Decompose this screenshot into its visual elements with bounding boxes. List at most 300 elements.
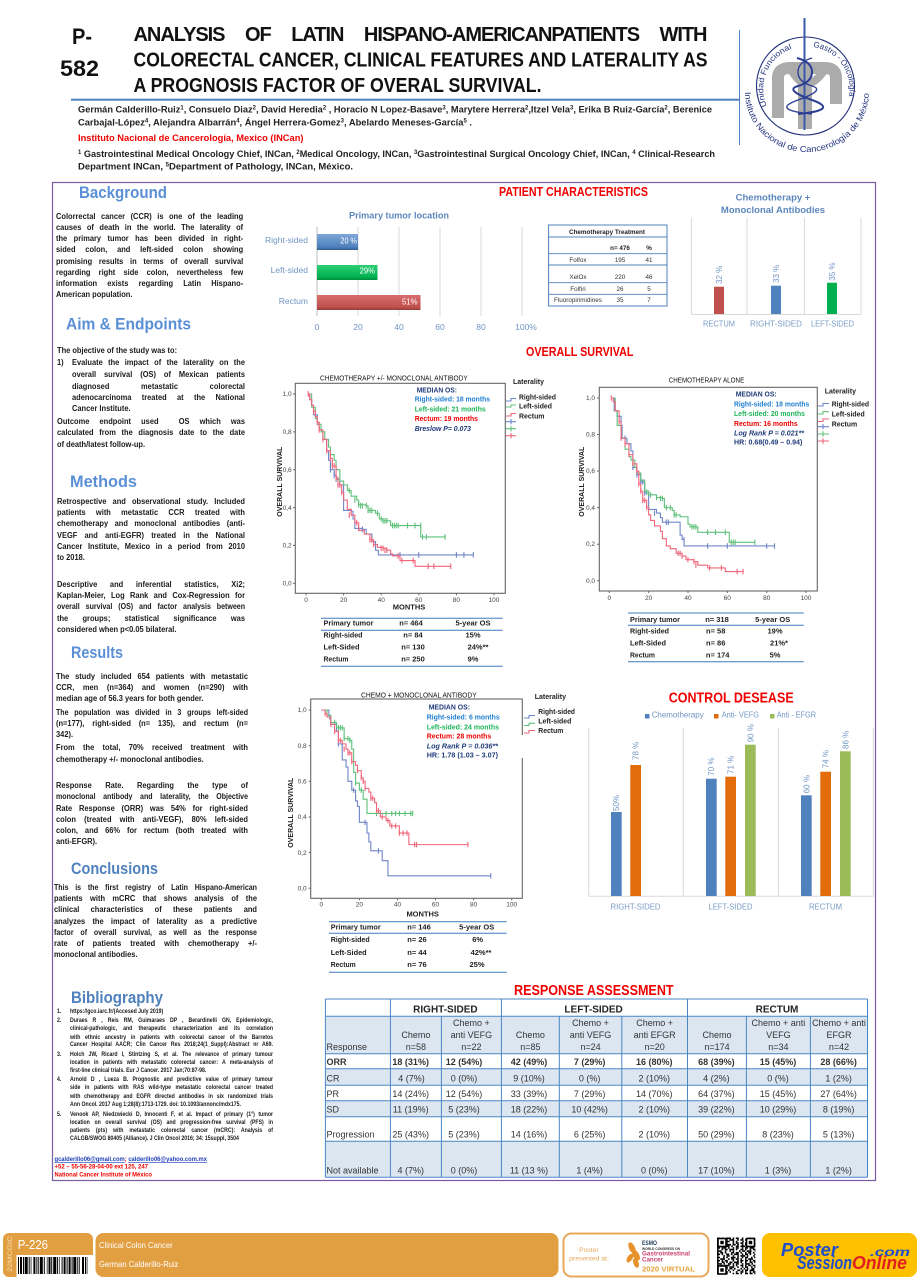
footer: session and author band: Clinical Colon Cancer [99,1240,173,1250]
list: bibliography references: Arnold D , Lueza B. Prognostic and predictive value of primary tumour [70,1076,273,1083]
chart: Kaplan-Meier chemotherapy +/- monoclonal antibody: Laterality [513,377,545,386]
list: bibliography references: side in patients with RAS wild-type metastatic colorectal cancer treated [70,1084,273,1091]
list: bibliography references: location in patients with metastatic colorectal cancer: A meta-analysis of [70,1059,273,1066]
table: 5-year OS, chemo + monoclonal antibody: n= 76 [407,960,427,969]
table: response assessment: 7 (29%) [574,1089,605,1099]
footer: congress badge: 2020 VIRTUAL [642,1267,696,1274]
chart legend: Chemotherapy [652,711,704,720]
chart: Kaplan-Meier chemotherapy +/- monoclonal antibody: 80 [453,597,460,604]
table: response assessment: n=58 [406,1042,426,1052]
icon: QR code [717,1238,755,1275]
text block: methods design: chemotherapy and monoclonal antibodies (anti- [57,518,245,528]
table: 5-year OS, chemo + monoclonal antibody: Left-Sided [331,948,367,957]
table: response assessment: n=22 [461,1042,482,1052]
text block: response rate: colon, and 66% for rectum (both treated with [56,825,248,835]
bar chart: primary tumor location: 20 % [340,235,357,245]
table: response assessment: 8 (23%) [762,1130,794,1140]
text block: methods design: Retrospective and observational study. Included [57,496,245,506]
icon: institute logo: Gastro - Oncología [814,42,856,96]
table: response assessment: 0 (0%) [451,1166,477,1176]
table: 5-year OS, chemotherapy alone: n= 318 [705,615,729,624]
text block: conclusions [54,882,257,959]
text block: results population: chemotherapy +/- monoclonal antibodies. [56,754,204,764]
table: 5-year OS, chemo + monoclonal antibody: Right-sided [331,935,370,944]
bar chart: primary tumor location: 0 [315,322,320,332]
table: response assessment: Chemo + anti [752,1018,805,1028]
table: response assessment: 6 (25%) [574,1130,605,1140]
text: 1. [57,1008,61,1015]
list: objective item: adenocarcinoma treated at the National [72,392,245,402]
table: 5-year OS, all patients: Left-Sided [324,643,360,652]
chart: Kaplan-Meier chemotherapy alone: 0,4 [586,505,595,512]
chart: Kaplan-Meier chemotherapy +/- monoclonal antibody: 0 [304,597,308,604]
chart: Kaplan-Meier chemotherapy alone: 0,8 [586,432,595,438]
table: 5-year OS, chemo + monoclonal antibody [329,922,507,972]
authors: Carbajal-López4, Alejandra Albarrán4, Ángel Herrera-Gomez3, Abelardo Meneses-García5 . [78,118,472,128]
table: chemotherapy treatment: Fluoropirimidines [554,297,602,304]
table: 5-year OS, chemotherapy alone: Left-Sided [630,639,666,648]
chart: Kaplan-Meier chemotherapy alone: 60 [724,595,731,602]
chart: Kaplan-Meier chemo + monoclonal antibody: 0 [319,902,323,909]
table: response assessment: 2 (10%) [639,1130,670,1140]
bar chart: chemotherapy + monoclonal antibodies: 35 % [828,262,837,281]
list: objective item: diagnosed metastatic colorectal [72,381,245,391]
chart legend: Anti - EFGR [777,711,816,720]
chart: Kaplan-Meier chemotherapy alone: 80 [763,595,771,602]
chart: Kaplan-Meier chemotherapy +/- monoclonal antibody: 0,2 [283,542,292,550]
chart: Kaplan-Meier chemo + monoclonal antibody: MEDIAN OS: [429,703,470,712]
chart: Kaplan-Meier chemotherapy +/- monoclonal antibody: CHEMOTHERAPY +/- MONOCLONAL ANTIBODY [320,374,468,383]
bar chart: primary tumor location: 20 [353,322,363,332]
list: bibliography references: Ann Oncol. 2017 Aug 1;28(8):1713-1729. doi: 10.1093/annonc/mdx175. [70,1101,241,1108]
table: response assessment: VEFG [766,1030,791,1040]
table: response assessment: 68 (39%) [698,1057,735,1067]
text block: results population: CCR, men (n=364) and women (n=290) with [56,682,248,692]
table: chemotherapy treatment: Folfox [569,257,587,264]
list: objective item: Evaluate the impact of the laterality on the [72,357,245,367]
text block: background: information exists regarding Latin Hispano- [56,278,243,288]
chart: Kaplan-Meier chemo + monoclonal antibody: 60 [432,902,439,909]
list: bibliography references: Holch JW, Ricard I, Stintzing S, et al. The relevance of primary tumour [70,1051,273,1058]
footer: session and author band [96,1233,558,1277]
contact details: +52 – 55-56-28-04-00 ext 125, 247 [54,1164,148,1171]
footer: congress badge: ESMO [642,1240,657,1247]
footer: PosterSessionOnline logo: Online [852,1253,907,1273]
text block: response rate: monoclonal antibody and laterality, the Objective [56,791,248,801]
text: 3. [57,1051,61,1058]
chart: Kaplan-Meier chemotherapy alone: Left-sided [832,410,865,419]
chart: Kaplan-Meier chemo + monoclonal antibody: Rectum: 28 months [427,732,491,741]
footer: PosterSessionOnline logo: Session [797,1253,852,1273]
text block: outcome endpoint [57,416,245,449]
text block: response rate: Rate Response (ORR) was 54% for right-sided [56,803,248,813]
table: response assessment: 2 (10%) [639,1074,670,1084]
icon: wheat ornament [625,1241,642,1269]
chart: Kaplan-Meier chemotherapy +/- monoclonal antibody: Left-sided: 21 months [415,404,486,414]
table: response assessment: RIGHT-SIDED [413,1004,478,1015]
table: 5-year OS, chemotherapy alone [628,613,804,662]
chart: Kaplan-Meier chemo + monoclonal antibody: CHEMO + MONOCLONAL ANTIBODY [361,691,477,700]
chart: Kaplan-Meier chemotherapy +/- monoclonal antibody: Left-sided [519,401,552,410]
chart: Kaplan-Meier chemotherapy +/- monoclonal antibody: 60 [415,597,423,604]
bar chart: control desease [589,711,873,911]
chart: Kaplan-Meier chemotherapy +/- monoclonal antibody: Right-sided [519,392,556,401]
table: response assessment: anti VEFG [451,1030,492,1040]
table: response assessment: 27 (64%) [820,1089,857,1099]
chart: Kaplan-Meier chemo + monoclonal antibody: 0,8 [298,743,307,750]
table: response assessment: Chemo + [453,1018,490,1028]
bar chart: primary tumor location: 51% [402,296,418,306]
table: response assessment: 0 (%) [579,1074,600,1084]
table: response assessment: 4 (7%) [397,1166,424,1176]
footer: congress badge: Gastrointestinal [642,1252,690,1258]
text block: outcome endpoint: of death/latest follow-up. [57,439,145,449]
bar chart: primary tumor location: Rectum [279,296,308,306]
table: response assessment: 7 (29%) [574,1057,605,1067]
heading: patient characteristics: PATIENT CHARACTERISTICS [499,184,648,199]
chart: Kaplan-Meier chemo + monoclonal antibody: Right-sided: 6 months [427,713,500,722]
table: response assessment: PR [326,1089,340,1099]
chart: Kaplan-Meier chemo + monoclonal antibody: 80 [470,902,478,909]
list: bibliography references: clinical-pathologic, and therapeutic characterization and its correlation [70,1025,273,1032]
footer: session and author band: German Calderillo-Ruiz [99,1259,178,1269]
heading: Methods: Methods [70,472,137,491]
icon: institute logo [745,18,869,152]
text block: outcome endpoint: Outcome endpoint used OS which was [57,416,245,426]
chart: Kaplan-Meier chemotherapy alone: 0,6 [586,468,595,475]
chart: Kaplan-Meier chemo + monoclonal antibody: HR: 1.78 (1.03 – 3.07) [427,751,498,760]
heading: Aim and Endpoints: Aim & Endpoints [66,314,191,334]
text block: methods design: patients with metastatic CCR treated with [57,507,245,517]
footer: poster id and barcode: P-226 [18,1237,48,1252]
text block: response rate [56,780,248,846]
table: response assessment: Chemo + [636,1018,673,1028]
affiliations [78,149,715,172]
table: response assessment: 15 (45%) [760,1057,796,1067]
table: response assessment: 4 (2%) [703,1074,730,1084]
table: response assessment: 9 (10%) [513,1074,545,1084]
table: 5-year OS, chemo + monoclonal antibody: 6% [472,935,483,944]
table: 5-year OS, chemotherapy alone: n= 86 [706,639,725,648]
title [134,24,708,97]
chart: Kaplan-Meier chemotherapy alone: 40 [684,595,692,602]
chart: Kaplan-Meier chemotherapy alone: Laterality [825,387,857,396]
table: response assessment: Chemo [516,1030,545,1040]
list: bibliography references: Cancer Hospital AACR; Clin Cancer Res 2018;24(1_Suppl):Abstract nr A69. [70,1041,273,1048]
heading: Background: Background [79,183,167,202]
chart: Kaplan-Meier chemotherapy +/- monoclonal antibody: Breslow P= 0.073 [415,424,472,433]
title: COLORECTAL CANCER, CLINICAL FEATURES AND LATERALITY AS [134,50,708,72]
footer: poster id and barcode: 22MCGIC [7,1236,14,1272]
table: response assessment: Response [326,1042,367,1052]
chart: Kaplan-Meier chemotherapy alone: Right-sided [832,400,869,409]
chart: Kaplan-Meier chemotherapy alone: Left-sided: 20 months [734,409,805,418]
chart: Kaplan-Meier chemotherapy +/- monoclonal antibody: MONTHS [393,602,425,611]
heading: Bibliography: Bibliography [71,988,163,1007]
chart: Kaplan-Meier chemotherapy alone: CHEMOTHERAPY ALONE [669,376,744,385]
table: 5-year OS, chemotherapy alone: Right-sided [630,627,669,636]
table: response assessment: 5 (23%) [448,1105,480,1115]
text block: results population: median age of 56.3 years for both gender. [56,693,204,703]
text block: methods design: Cancer Institute, Mexico in a period from 2010 [57,541,245,551]
text block: background: Colorrectal cancer (CCR) is one of the leading [56,210,243,220]
heading: overall survival: OVERALL SURVIVAL [526,344,634,359]
table: response assessment: 5 (13%) [823,1130,854,1140]
chart: Kaplan-Meier chemotherapy +/- monoclonal antibody: 1,0 [283,391,292,398]
chart: Kaplan-Meier chemotherapy alone: Log Rank P = 0.021** [734,429,805,438]
table: response assessment [325,999,867,1177]
table: 5-year OS, chemo + monoclonal antibody: n= 44 [407,948,428,957]
authors: Germán Calderillo-Ruiz1, Consuelo Diaz2, David Heredia2 , Horacio N Lopez-Basave3, Marytere Herrera2,Itzel Vela3, Erika B Ruiz-García2, Berenice [78,105,712,115]
icon: institute logo: Unidad Funcional [757,44,792,108]
table: chemotherapy treatment: 35 [616,297,624,304]
table: response assessment: 16 (80%) [636,1057,673,1067]
panel: main poster body [52,182,876,1180]
bar chart: primary tumor location: Left-sided [271,265,308,275]
text block: methods design [57,496,245,562]
table: chemotherapy treatment: 195 [615,257,626,264]
text: 2. [57,1017,61,1024]
text block: conclusions: This is the first registry of Latin Hispano-American [54,882,257,892]
chart: Kaplan-Meier chemo + monoclonal antibody [288,691,575,919]
footer: congress badge: Cancer [642,1257,664,1263]
chart: Kaplan-Meier chemo + monoclonal antibody: Left-sided: 24 months [427,723,499,732]
bar chart: control desease: 90 % [746,724,755,742]
text block: background: the primary tumor has been divided in right- [56,232,243,242]
text block: conclusions: factor of overall survival, as well as the response [54,927,257,937]
text block: methods statistics: Descriptive and inferential statistics, Xi2; [57,579,245,589]
table: 5-year OS, all patients: n= 464 [399,619,424,628]
text block: conclusions: monoclonal antibodies. [54,949,138,959]
chart: Kaplan-Meier chemo + monoclonal antibody: OVERALL SURVIVAL [288,777,295,848]
chart: Kaplan-Meier chemotherapy +/- monoclonal antibody: 0,6 [283,467,292,474]
table: response assessment: n=174 [704,1042,730,1052]
bar chart: control desease: RECTUM [809,902,842,911]
bar chart: control desease: 78 % [632,742,641,760]
footer: congress badge: presented at: [569,1256,609,1263]
bar chart: primary tumor location: Right-sided [265,235,308,245]
table: chemotherapy treatment: Chemotherapy Treatment [569,229,646,236]
table: response assessment: 12 (54%) [446,1089,482,1099]
chart: Kaplan-Meier chemotherapy +/- monoclonal antibody [277,374,556,611]
table: chemotherapy treatment: % [646,245,652,252]
text block: conclusions: analyzes the impact of laterality as a predictive [54,916,257,926]
list: bibliography references: https://gco.iarc.fr/(Accesed July 2019) [70,1008,163,1015]
table: 5-year OS, chemotherapy alone: 5% [770,651,781,660]
list: bibliography references [57,1008,273,1142]
text block: conclusions: clinical characteristics of these patients and [54,904,257,914]
table: chemotherapy treatment: n= 476 [610,245,630,252]
table: response assessment: ORR [326,1057,347,1067]
list: bibliography references: CALGB/SWOG 80405 (Alliance). J Clin Oncol 2016; 34: 15suppl, 3504 [70,1135,239,1142]
table: chemotherapy treatment: 7 [647,297,651,304]
table: 5-year OS, all patients: 5-year OS [455,619,491,628]
table: response assessment: 25 (43%) [392,1130,429,1140]
footer: congress badge: Poster [579,1247,600,1254]
chart: Kaplan-Meier chemotherapy alone: MEDIAN OS: [736,390,777,399]
list: bibliography references: Venook AP, Niedzwiecki D, Innocenti F, et al. Impact of primary (1°) tumor [70,1111,273,1118]
contact details: gcalderillo06@gmail.com; calderillo06@yahoo.com.mx [54,1156,207,1163]
table: 5-year OS, chemotherapy alone: n= 174 [706,651,730,660]
table: response assessment: Chemo [401,1030,430,1040]
table: response assessment: 11 (19%) [393,1105,429,1115]
table: response assessment: 1 (2%) [825,1166,852,1176]
chart: Kaplan-Meier chemotherapy alone [579,376,869,602]
title: A PROGNOSIS FACTOR OF OVERAL SURVIVAL. [134,75,542,97]
list: bibliography references: first-line clinical trials. Eur J Cancer. 2017 Jan;70:87-98. [70,1067,206,1074]
affiliations: 1 Gastrointestinal Medical Oncology Chief, INCan, 2Medical Oncology, INCan, 3Gastrointestinal Surgical Oncology Chief, INCan, 4 Clinical-Research [78,149,715,159]
chart: Kaplan-Meier chemotherapy alone: OVERALL SURVIVAL [579,446,586,517]
bar chart: chemotherapy + monoclonal antibodies [691,193,861,329]
table: 5-year OS, all patients: n= 130 [401,643,425,652]
table: response assessment: Progression [326,1130,375,1140]
table: response assessment: n=42 [829,1042,849,1052]
table: response assessment: anti EFGR [634,1030,676,1040]
table: response assessment: 14 (16%) [511,1130,547,1140]
bar chart: primary tumor location: 40 [394,322,404,332]
footer: PosterSessionOnline logo: .com [870,1245,910,1259]
contact details [54,1156,207,1179]
heading: Results: Results [71,643,123,662]
text block: conclusions: patients with mCRC that shows analysis of the [54,893,257,903]
footer: congress badge [564,1234,708,1276]
text block: response rate: colon (treated with anti-VEGF), 80% left-sided [56,814,248,824]
list: bibliography references: Duraes R , Reis RM, Guimaraes DP , Berardinelli GN, Epidemiologic, [70,1017,273,1024]
poster number: 582 [60,56,99,81]
table: response assessment: LEFT-SIDED [564,1004,623,1015]
table: response assessment: 5 (23%) [448,1130,480,1140]
footer: poster id and barcode [3,1233,93,1277]
table: 5-year OS, chemo + monoclonal antibody: 42%** [471,948,492,957]
chart: Kaplan-Meier chemotherapy +/- monoclonal antibody: 20 [340,597,348,604]
affiliations: Department INCan, 5Department of Pathology, INCan, México. [78,162,353,172]
bar chart: primary tumor location: 29% [360,265,375,275]
heading: response assessment: RESPONSE ASSESSMENT [514,983,674,999]
table: response assessment: 8 (19%) [823,1105,854,1115]
text block: methods design: to 2018. [57,552,85,562]
table: 5-year OS, all patients: Rectum [324,655,349,664]
bar chart: chemotherapy + monoclonal antibodies: LEFT-SIDED [811,320,854,329]
text block: results population [56,671,248,764]
table: response assessment: 39 (22%) [698,1105,735,1115]
text block: aim and endpoints objective: The objective of the study was to: [57,345,177,355]
chart: Kaplan-Meier chemotherapy +/- monoclonal antibody: 100 [489,597,500,604]
bar chart: control desease: 86 % [842,731,851,749]
bar chart: control desease: 60 % [802,775,811,793]
bar chart: chemotherapy + monoclonal antibodies: 33 % [772,265,781,283]
table: response assessment: Not available [326,1166,379,1176]
table: response assessment: 1 (2%) [825,1074,852,1084]
table: 5-year OS, chemotherapy alone: 19% [767,627,783,636]
chart: Kaplan-Meier chemotherapy alone: 1,0 [586,395,595,402]
text block: methods statistics: Kaplan-Meier, Log Rank and Cox-Regression for [57,590,245,600]
table: response assessment: 1 (3%) [765,1166,791,1176]
table: response assessment: CR [326,1074,340,1084]
table: chemotherapy treatment: 5 [647,286,651,293]
chart: Kaplan-Meier chemotherapy alone: 0,2 [586,541,595,548]
footer: PosterSessionOnline logo [762,1233,917,1277]
bar chart: control desease: 70 % [707,757,716,776]
table: 5-year OS, all patients [321,618,503,666]
chart: Kaplan-Meier chemotherapy alone: HR: 0.68(0.49 – 0.94) [734,438,803,447]
chart legend: Anti- VEFG [722,711,759,720]
table: 5-year OS, chemotherapy alone: Rectum [630,651,655,660]
text block: results population: The study included 654 patients with metastatic [56,671,248,681]
text: 4. [57,1076,61,1083]
chart: Kaplan-Meier chemo + monoclonal antibody: 20 [356,902,363,909]
table: 5-year OS, all patients: n= 250 [401,655,425,664]
list: bibliography references: with ethnic ancestry in patients with colorectal cancer of the Barretos [70,1034,273,1041]
list: bibliography references: with chemotherapy and EGFR directed antibodies in six randomized trials [70,1093,273,1100]
bar chart: primary tumor location: 100% [515,322,537,332]
poster number: P- [72,24,92,49]
table: 5-year OS, chemo + monoclonal antibody: n= 146 [407,922,431,931]
chart: Kaplan-Meier chemo + monoclonal antibody: 0,4 [298,814,307,821]
title: ANALYSIS OF LATIN HISPANO-AMERICANPATIENTS WITH [134,24,708,46]
table: chemotherapy treatment: 220 [615,274,626,281]
chart: Kaplan-Meier chemotherapy alone: 100 [801,595,812,602]
table: 5-year OS, all patients: 15% [465,631,481,640]
chart: Kaplan-Meier chemo + monoclonal antibody: 100 [506,902,518,909]
table: chemotherapy treatment: Folfiri [570,286,586,293]
chart: Kaplan-Meier chemotherapy +/- monoclonal antibody: OVERALL SURVIVAL [277,446,284,517]
bar chart: chemotherapy + monoclonal antibodies: RIGHT-SIDED [750,320,802,329]
text block: outcome endpoint: calculated from the diagnosis date to the date [57,427,245,437]
table: response assessment: Chemo + anti [812,1018,866,1028]
icon: institute logo: Instituto Nacional de Cancerología de México [745,92,869,152]
table: response assessment: Chemo + [572,1018,609,1028]
text: 5. [57,1111,61,1118]
bar chart: primary tumor location: 60 [435,322,445,332]
poster number [60,24,99,81]
text block: results population: From the total, 70% received treatment with [56,742,248,752]
bar chart: chemotherapy + monoclonal antibodies: Monoclonal Antibodies [721,205,825,216]
list: objective item [57,357,245,413]
text block: background: promising results in terms of overall survival [56,256,243,266]
table: chemotherapy treatment: 46 [645,274,653,281]
table: 5-year OS, chemotherapy alone: n= 58 [706,627,725,636]
chart: Kaplan-Meier chemotherapy alone: 0 [607,595,611,602]
table: response assessment: 10 (29%) [760,1105,796,1115]
text block: results population: The population was divided in 3 groups left-sided [56,707,248,717]
table: 5-year OS, chemotherapy alone: 21%* [770,639,788,648]
table: response assessment: 64 (37%) [698,1089,735,1099]
chart: Kaplan-Meier chemo + monoclonal antibody: MONTHS [406,910,439,919]
table: 5-year OS, chemo + monoclonal antibody: 5-year OS [459,922,494,931]
table: response assessment: 28 (66%) [820,1057,857,1067]
table: response assessment: SD [326,1105,340,1115]
table: response assessment: 14 (24%) [392,1089,429,1099]
chart: Kaplan-Meier chemotherapy +/- monoclonal antibody: MEDIAN OS: [417,386,457,394]
chart: Kaplan-Meier chemo + monoclonal antibody: 0,0 [298,886,307,892]
table: response assessment: 12 (54%) [446,1057,482,1067]
bar chart: control desease: LEFT-SIDED [708,902,753,911]
table: chemotherapy treatment: 26 [616,286,624,293]
text block: response rate: Response Rate. Regarding the type of [56,780,248,790]
table: 5-year OS, all patients: Right-sided [324,631,363,640]
bar chart: primary tumor location [265,211,537,332]
table: 5-year OS, chemo + monoclonal antibody: Rectum [331,960,356,969]
list: objective item: overall survival (OS) of Mexican patients [72,369,245,379]
bar chart: chemotherapy + monoclonal antibodies: RECTUM [703,320,735,329]
text block: methods statistics: overall survival (OS) and factor analysis between [57,601,245,611]
table: response assessment: 4 (7%) [398,1074,425,1084]
footer: PosterSessionOnline logo: Poster [781,1240,839,1260]
text block: background: sided colon, and left-sided colon showing [56,244,243,254]
table: chemotherapy treatment: 41 [645,257,653,264]
table: response assessment: 17 (10%) [698,1166,735,1176]
chart: Kaplan-Meier chemo + monoclonal antibody: Left-sided [538,717,572,726]
